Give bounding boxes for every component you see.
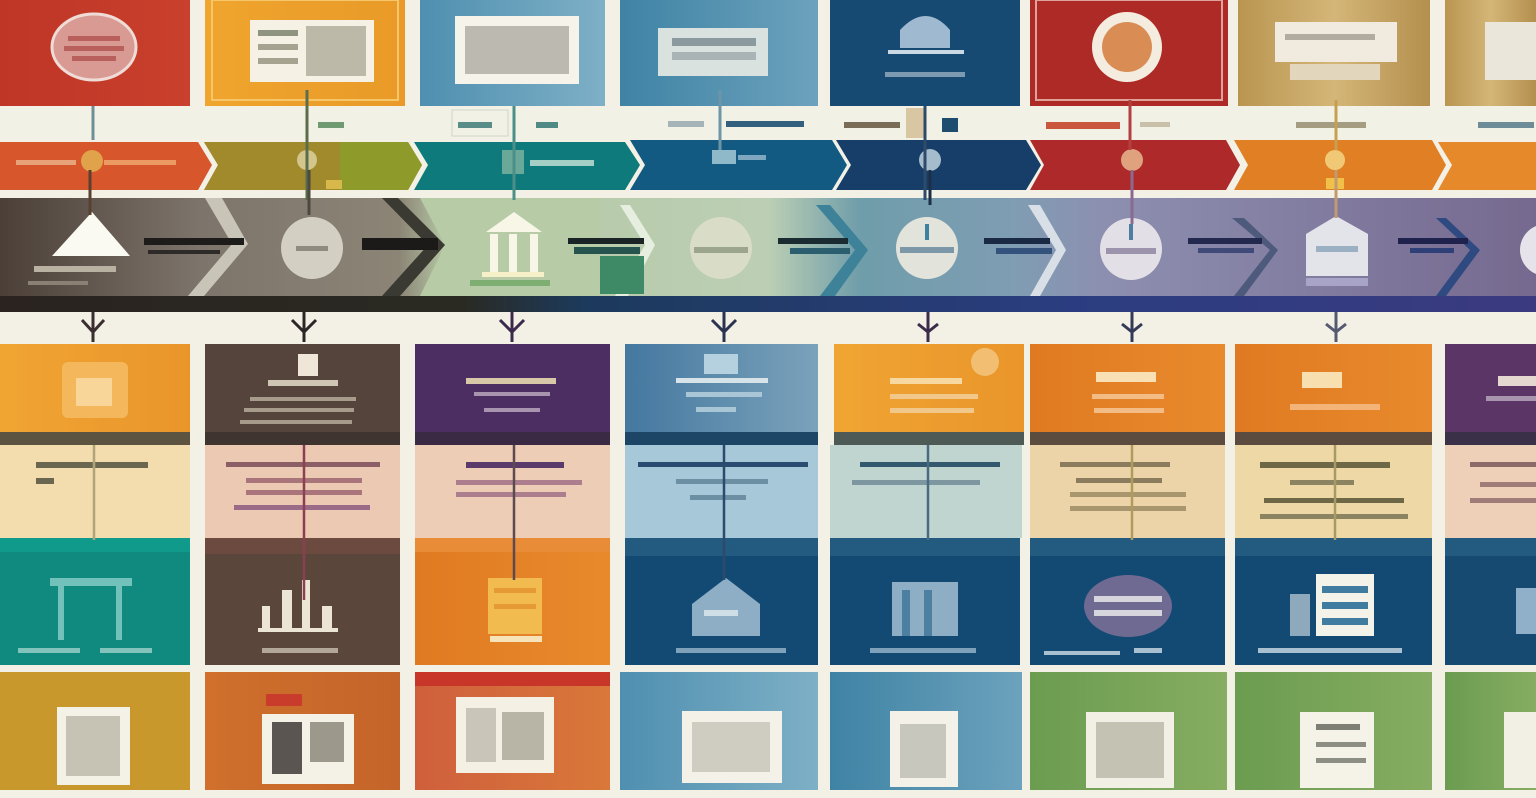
node 7 house icon: [1306, 216, 1368, 286]
document card: [0, 672, 190, 790]
column 5 stacked cards: [830, 344, 1024, 790]
header card: [1445, 344, 1536, 445]
node 6 circle: [1100, 218, 1162, 280]
arrow 1: [144, 238, 244, 254]
header card: [0, 344, 190, 445]
document card: [1235, 672, 1432, 790]
row: label strip: [0, 108, 1536, 138]
icon card navy: [830, 538, 1020, 665]
header card: [625, 344, 818, 445]
text card: [1030, 445, 1225, 538]
chevron 8: [1438, 142, 1536, 190]
big chevron band: [0, 198, 1536, 312]
text card: [0, 445, 190, 538]
document card: [1445, 672, 1536, 790]
column 8 stacked cards: [1445, 344, 1536, 790]
header card: [1235, 344, 1432, 445]
node 8 partial circle: [1520, 224, 1536, 276]
icon card navy: [1030, 538, 1225, 665]
icon card navy: [1235, 538, 1432, 665]
panel: top 7 tan with document: [1238, 0, 1430, 106]
panel: top 6 red with circle: [1030, 0, 1228, 106]
arrow 2: [362, 238, 438, 250]
document card: [830, 672, 1022, 790]
chevron 5: [836, 140, 1041, 190]
row: top panels: [0, 0, 1536, 106]
node 4 circle: [690, 217, 752, 279]
node 1 triangle icon: [28, 212, 130, 285]
panel: top 4 blue with document: [620, 0, 818, 106]
column 3 stacked cards: [415, 344, 610, 790]
column 4 stacked cards: [620, 344, 818, 790]
panel: top 8 tan partial: [1445, 0, 1536, 106]
document card: [620, 672, 818, 790]
arrow 5: [984, 238, 1052, 254]
column 1 stacked cards: [0, 344, 190, 790]
panel: top 2 amber with document: [205, 0, 405, 106]
chevron 2: [204, 142, 422, 190]
icon card brown: [205, 538, 400, 665]
text card: [1235, 445, 1432, 538]
text card: [830, 445, 1022, 538]
header card: [1030, 344, 1225, 445]
node 5 circle: [896, 217, 958, 279]
document card: [415, 672, 610, 790]
chevron 6: [1030, 140, 1240, 190]
icon card orange: [415, 538, 610, 665]
column 7 stacked cards: [1235, 344, 1432, 790]
text card: [1445, 445, 1536, 538]
text card: [205, 445, 400, 538]
header card: [415, 344, 610, 445]
column 6 stacked cards: [1030, 344, 1227, 790]
node 2 circle: [281, 217, 343, 279]
chevron 3: [414, 142, 640, 190]
text card: [625, 445, 818, 538]
column 2 stacked cards: [205, 344, 400, 790]
arrow 3: [568, 238, 644, 294]
connectors: [82, 90, 1346, 342]
panel: top 1 red with circle: [0, 0, 190, 106]
arrow 7: [1398, 238, 1468, 253]
node 3 temple icon: [470, 212, 550, 286]
chevron 4: [630, 140, 847, 190]
chevron 7: [1234, 140, 1446, 190]
panel: top 3 sky with document: [420, 0, 605, 106]
chevron 1: [0, 142, 212, 190]
text card: [415, 445, 610, 538]
icon card navy: [625, 538, 818, 665]
lower connectors: [94, 445, 1335, 600]
arrow 6: [1188, 238, 1262, 253]
icon card teal: [0, 538, 190, 665]
header card: [834, 344, 1024, 445]
document card: [1030, 672, 1227, 790]
row: small chevrons: [0, 140, 1536, 190]
panel: top 5 navy with building: [830, 0, 1020, 106]
icon card navy: [1445, 538, 1536, 665]
document card: [205, 672, 400, 790]
arrow 4: [778, 238, 850, 254]
header card: [205, 344, 400, 445]
